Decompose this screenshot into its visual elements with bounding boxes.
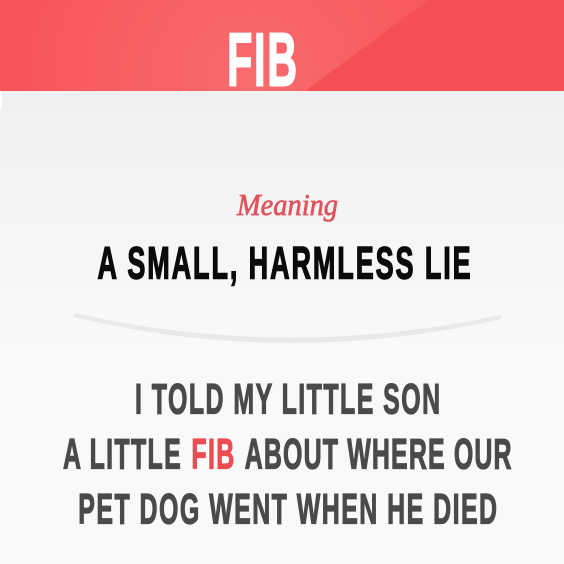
title: FIB bbox=[227, 17, 297, 102]
header band bbox=[0, 0, 564, 109]
line 2 start: A LITTLE bbox=[63, 431, 181, 478]
line 2 end: ABOUT WHERE OUR bbox=[245, 431, 512, 478]
line 3: PET DOG WENT WHEN HE DIED bbox=[78, 486, 497, 533]
line 1: I TOLD MY LITTLE SON bbox=[135, 376, 440, 423]
meaning label: Meaning bbox=[236, 187, 338, 222]
example sentence bbox=[63, 376, 512, 533]
curved divider bbox=[74, 313, 501, 343]
definition: A SMALL, HARMLESS LIE bbox=[97, 237, 471, 288]
highlighted word: FIB bbox=[191, 431, 234, 478]
